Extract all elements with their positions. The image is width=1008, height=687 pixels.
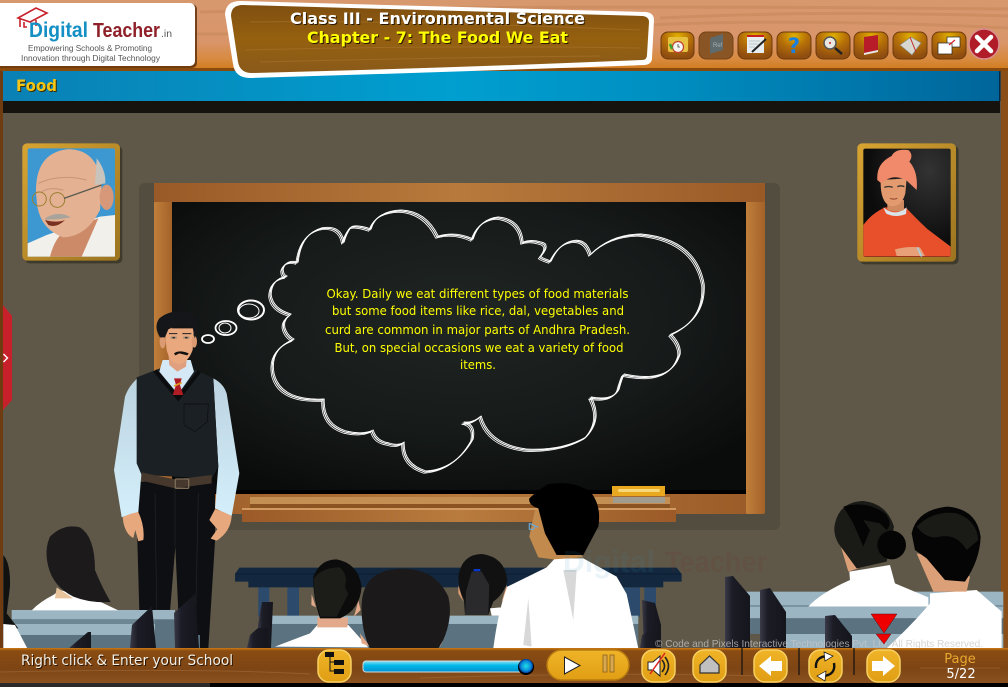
icon: notepad button	[738, 32, 772, 59]
bottom control bar	[0, 648, 1008, 687]
icon: help button	[777, 32, 811, 59]
speech text	[325, 287, 630, 372]
desks row	[12, 592, 1003, 649]
trousers	[137, 482, 215, 648]
speech text: but some food items like rice, dal, vegetables and	[332, 304, 624, 318]
page counter	[944, 652, 976, 682]
title plaque: Class III - Environmental Science	[290, 9, 585, 28]
right desks	[743, 592, 1003, 649]
thought dots	[202, 300, 264, 343]
left side border	[0, 70, 3, 650]
copyright notice: © Code and Pixels Interactive Technologies Pvt. Ltd. All Rights Reserved.	[655, 638, 983, 650]
thought bubble	[202, 210, 704, 473]
title plaque	[225, 1, 654, 78]
section heading bar: Food: Food	[16, 76, 57, 95]
title: class: Class III - Environmental Science	[291, 10, 586, 29]
left front desk	[12, 610, 200, 648]
section heading bar: Food: Food	[17, 77, 58, 96]
icon: folder clock button	[661, 32, 694, 59]
button: next	[867, 650, 900, 682]
icon: open book button	[893, 32, 927, 59]
page counter: 5/22	[946, 667, 976, 682]
icon: magnifier button	[816, 32, 850, 59]
student: tall boy with glasses	[493, 483, 638, 648]
tie	[173, 378, 183, 395]
icon: help button: ?	[788, 34, 800, 58]
button: table of contents	[318, 650, 351, 682]
school prompt text: Right click & Enter your School	[21, 653, 233, 669]
logo panel: Digital Teacher	[0, 3, 197, 68]
title: chapter: Chapter - 7: The Food We Eat	[308, 29, 569, 48]
left drawer tab	[3, 305, 12, 410]
icon: window resize button	[932, 32, 966, 59]
progress bar	[363, 659, 534, 675]
student: girl far left	[3, 555, 27, 648]
school prompt text: Right click & Enter your School	[22, 654, 234, 670]
right side border	[1001, 70, 1008, 650]
button: reload	[809, 650, 842, 682]
collar and neck	[159, 360, 194, 391]
eyes	[171, 335, 189, 341]
moustache	[174, 351, 189, 355]
speech text: But, on special occasions we eat a variety of food	[334, 341, 624, 355]
watermark: Digital Teacher: Teacher	[665, 546, 767, 579]
logo panel: Digital Teacher: .in	[161, 29, 172, 40]
students	[3, 483, 1002, 648]
student: girl with ponytail	[458, 554, 508, 616]
speech text: items.	[460, 358, 496, 372]
icon: dictionary button	[854, 32, 888, 59]
student: girl with long hair	[32, 526, 118, 610]
button: home	[693, 650, 726, 682]
play and pause buttons	[547, 650, 629, 680]
student: girl with bun	[808, 501, 928, 607]
icon: graduation cap	[18, 8, 47, 27]
back bench	[235, 568, 682, 630]
logo panel: Digital Teacher: Teacher	[93, 20, 160, 42]
center desk	[268, 616, 638, 649]
hair	[156, 311, 198, 338]
logo panel: Digital Teacher: Empowering Schools & Promoting	[28, 43, 152, 53]
icon: reference book button	[699, 32, 733, 59]
student: boy center-left	[275, 559, 368, 647]
button: mute	[642, 650, 675, 682]
chairs	[69, 576, 852, 648]
vest	[137, 368, 218, 478]
icon: close button	[969, 29, 999, 59]
student: boy large head	[360, 569, 450, 648]
speech text: curd are common in major parts of Andhra Pradesh.	[325, 323, 630, 337]
button: previous	[754, 650, 787, 682]
red arrow pointer	[871, 614, 897, 644]
student: boy right	[887, 507, 1002, 648]
eraser	[612, 486, 665, 503]
watermark: Digital Teacher: Digital	[563, 544, 655, 579]
icon: reference book button: Ref	[713, 43, 723, 49]
portrait: Vivekananda	[857, 143, 959, 264]
section heading bar: Food	[3, 71, 1000, 101]
title plaque: Chapter - 7: The Food We Eat	[307, 28, 568, 47]
face	[165, 328, 194, 364]
speech text: Okay. Daily we eat different types of food materials	[326, 287, 628, 301]
logo panel: Digital Teacher: Digital	[29, 19, 88, 42]
portrait: Gandhi	[22, 143, 122, 263]
teacher	[114, 311, 239, 648]
separator lines	[742, 648, 854, 675]
top wooden header bar	[0, 0, 1008, 71]
hands	[123, 512, 144, 541]
dark strip below heading	[3, 101, 1000, 113]
left sleeve	[114, 378, 142, 517]
blackboard	[139, 183, 780, 530]
right sleeve	[213, 378, 239, 516]
belt	[142, 472, 212, 488]
logo panel: Digital Teacher: Innovation through Digital Technology	[21, 53, 161, 63]
watermark: Digital Teacher	[563, 544, 767, 579]
chalk tray with eraser	[242, 486, 676, 522]
top toolbar buttons	[661, 29, 999, 59]
page counter: Page	[944, 652, 976, 667]
